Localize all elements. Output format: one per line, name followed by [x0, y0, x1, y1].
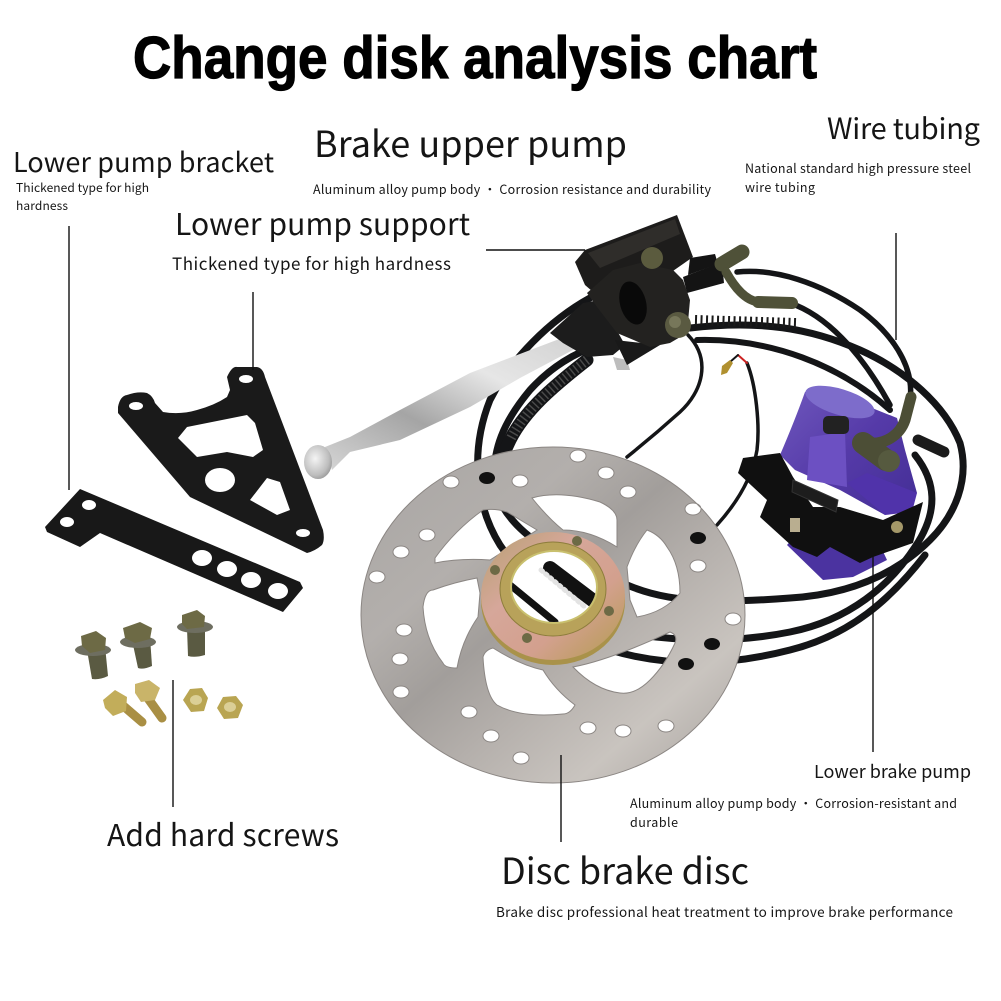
label: lower pump support: Thickened type for high hardness — [172, 250, 451, 275]
title: Change disk analysis chart — [133, 25, 817, 91]
caliper bracket — [738, 453, 923, 563]
label: lower brake pump: Lower brake pump — [814, 758, 971, 784]
label: disc brake disc: Disc brake disc — [501, 843, 749, 895]
lower bracket bar — [45, 489, 303, 612]
lever — [304, 330, 588, 479]
disc dark holes — [479, 472, 720, 670]
brake cables — [478, 271, 963, 662]
label: lower pump bracket: Lower pump bracket — [13, 141, 274, 180]
label: lower pump bracket — [13, 141, 274, 214]
wire terminal — [721, 360, 733, 375]
label: add hard screws: Add hard screws — [107, 811, 339, 855]
label: wire tubing — [745, 106, 980, 196]
caliper: lower brake pump — [738, 379, 923, 580]
springs on cables — [510, 360, 587, 440]
label: lower pump bracket: hardness — [16, 197, 68, 214]
label: lower brake pump: Aluminum alloy pump body · Corrosion-resistant and — [630, 793, 957, 812]
label: brake upper pump — [313, 116, 711, 198]
label: brake upper pump: Brake upper pump — [314, 116, 627, 168]
label: lower pump support — [172, 200, 470, 275]
lever ball — [304, 445, 332, 479]
caliper hose fitting — [863, 397, 944, 472]
label: disc brake disc: Brake disc professional heat treatment to improve brake performance — [496, 901, 953, 921]
hub ring — [481, 532, 625, 665]
label: lower brake pump — [630, 758, 971, 831]
reservoir — [575, 215, 693, 298]
leader lines — [69, 226, 896, 842]
disc rotor — [361, 447, 745, 783]
dark bolts — [75, 610, 213, 679]
label: brake upper pump: Aluminum alloy pump body · Corrosion resistance and durability — [313, 179, 711, 198]
gold bolts — [103, 680, 162, 722]
bolts — [641, 247, 663, 269]
upper hose fittings — [722, 252, 792, 303]
label: wire tubing: Wire tubing — [827, 106, 980, 148]
label: disc brake disc — [496, 843, 953, 921]
support bracket — [118, 367, 324, 553]
label: wire tubing: wire tubing — [745, 177, 815, 196]
label: wire tubing: National standard high pressure steel — [745, 158, 971, 177]
pivot — [550, 300, 625, 357]
master cylinder: brake upper pump — [550, 215, 724, 370]
screws — [75, 610, 243, 722]
nuts — [183, 688, 243, 719]
label: lower brake pump: durable — [630, 812, 678, 831]
caliper plug — [823, 416, 849, 434]
label: lower pump support: Lower pump support — [175, 200, 470, 244]
label: lower pump bracket: Thickened type for high — [16, 179, 149, 196]
body — [587, 263, 690, 347]
outlet pipe — [683, 262, 724, 293]
caliper coil — [792, 480, 838, 512]
